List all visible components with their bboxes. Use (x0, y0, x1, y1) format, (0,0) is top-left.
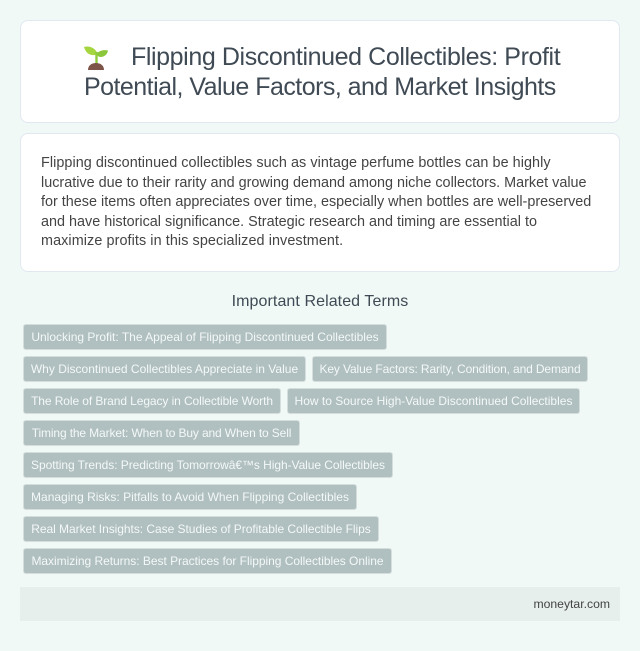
footer (20, 587, 620, 621)
tag (23, 388, 281, 414)
tag: Managing Risks: Pitfalls to Avoid When Flipping Collectibles (31, 490, 349, 504)
panel: title card (20, 20, 620, 123)
tag (23, 452, 393, 478)
tag: How to Source High-Value Discontinued Collectibles (295, 394, 572, 408)
title: Potential, Value Factors, and Market Insights (84, 73, 556, 101)
tag: Key Value Factors: Rarity, Condition, and Demand (319, 362, 581, 376)
icon: sprout (84, 46, 108, 70)
tag: Spotting Trends: Predicting Tomorrowâ€™s High-Value Collectibles (31, 458, 385, 472)
tag: Timing the Market: When to Buy and When to Sell (32, 426, 291, 440)
tag: Maximizing Returns: Best Practices for Flipping Collectibles Online (31, 554, 384, 568)
text block: description: for these items often appreciates over time, especially when bottles are well-preserved (41, 194, 591, 210)
tag (23, 516, 379, 542)
footer: moneytar.com (533, 597, 610, 611)
text block: description: lucrative due to their rarity and growing demand among niche collectors. Market value (41, 174, 587, 190)
text block: description: and have historical significance. Strategic research and timing are essential to (41, 214, 537, 230)
tag: Real Market Insights: Case Studies of Profitable Collectible Flips (31, 522, 371, 536)
tag list (23, 324, 588, 574)
title (84, 43, 560, 101)
title: Flipping Discontinued Collectibles: Profit (131, 43, 560, 71)
text block: description: Flipping discontinued collectibles such as vintage perfume bottles can be highly (41, 155, 551, 171)
tag (23, 356, 306, 382)
tag (23, 420, 300, 446)
tag (23, 324, 387, 350)
tag (287, 388, 580, 414)
tag: Unlocking Profit: The Appeal of Flipping Discontinued Collectibles (31, 330, 379, 344)
panel: description card (20, 133, 620, 272)
heading: related terms: Important Related Terms (232, 293, 408, 310)
text block: description: maximize profits in this specialized investment. (41, 233, 343, 249)
tag (23, 548, 392, 574)
tag: The Role of Brand Legacy in Collectible Worth (31, 394, 273, 408)
text block: description (41, 155, 591, 249)
tag: Why Discontinued Collectibles Appreciate in Value (31, 362, 298, 376)
tag (23, 484, 357, 510)
tag (312, 356, 588, 382)
